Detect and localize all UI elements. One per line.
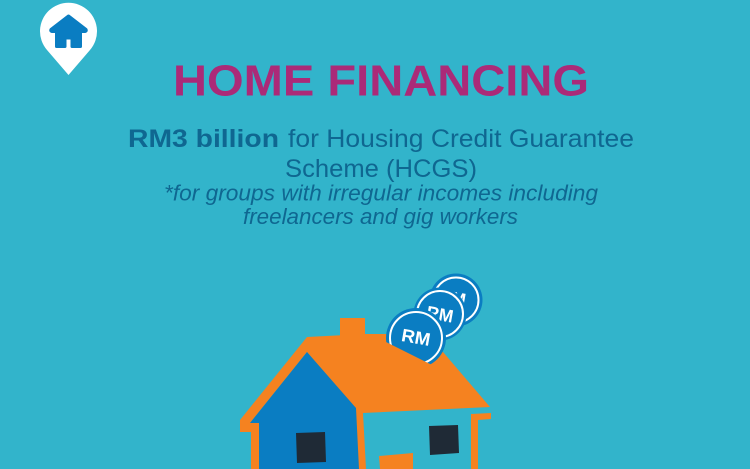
subtitle: RM3 billion — [128, 125, 279, 153]
title: HOME FINANCING — [173, 56, 589, 106]
right wall — [471, 413, 491, 469]
footnote: freelancers and gig workers — [243, 204, 518, 229]
back coin: RM — [437, 286, 467, 310]
footnote: *for groups with irregular incomes including — [164, 180, 599, 206]
subtitle: for Housing Credit Guarantee — [288, 125, 634, 153]
front coin: RM — [400, 325, 432, 350]
middle coin: RM — [425, 302, 455, 327]
icon: house — [240, 318, 491, 469]
right window — [429, 425, 459, 455]
roof and walls — [240, 334, 490, 469]
footnote — [164, 180, 599, 229]
icon: location pin with house — [40, 3, 97, 75]
left window — [296, 432, 326, 463]
subtitle — [128, 125, 634, 183]
icon: RM coins — [414, 274, 482, 340]
infographic canvas — [40, 2, 633, 469]
chimney — [340, 318, 365, 343]
subtitle: Scheme (HCGS) — [285, 155, 477, 183]
blue gable wall — [250, 352, 359, 469]
door — [379, 453, 413, 469]
front coin — [386, 308, 446, 368]
